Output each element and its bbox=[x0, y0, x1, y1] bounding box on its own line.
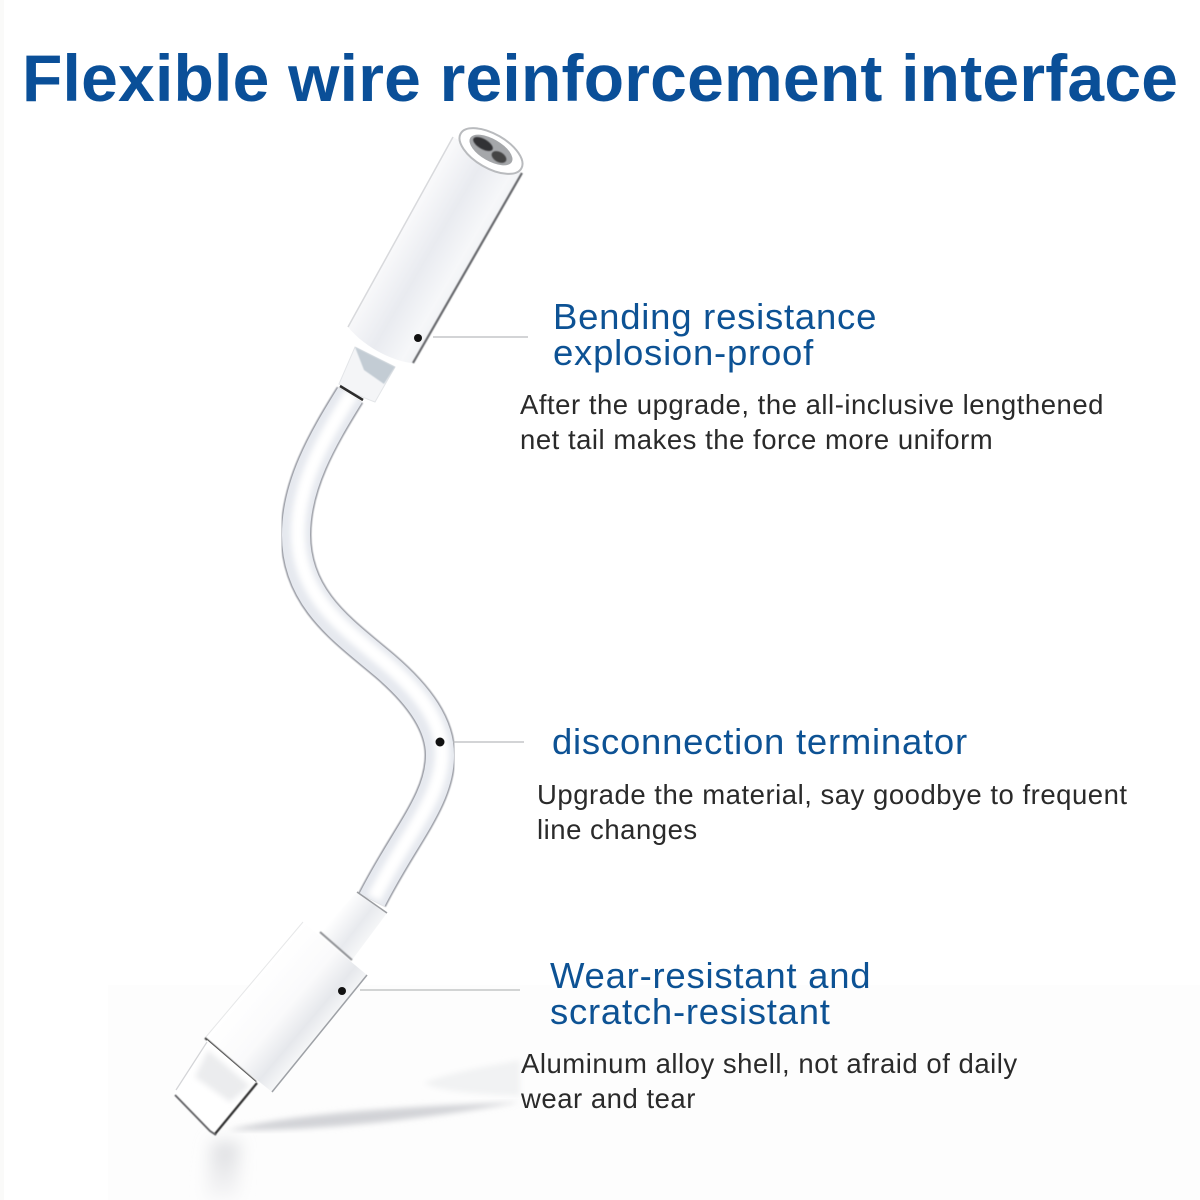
description: Upgrade the material, say goodbye to frequent bbox=[537, 779, 1128, 810]
description: Aluminum alloy shell, not afraid of daily bbox=[521, 1048, 1018, 1079]
description bbox=[520, 389, 1104, 455]
description bbox=[521, 1048, 1018, 1114]
cable bbox=[296, 393, 442, 900]
heading: Bending resistance bbox=[553, 296, 877, 337]
description bbox=[537, 779, 1128, 845]
heading: explosion-proof bbox=[553, 332, 814, 373]
callout: disconnection terminator bbox=[537, 721, 1128, 845]
description: line changes bbox=[537, 814, 698, 845]
lightning connector bbox=[174, 892, 387, 1135]
floor shadow bbox=[206, 1060, 520, 1200]
3.5mm jack housing bbox=[339, 119, 530, 402]
callout: bending resistance bbox=[520, 296, 1104, 455]
heading: disconnection terminator bbox=[552, 721, 968, 762]
callout: wear-resistant bbox=[521, 955, 1018, 1114]
jack marker dot bbox=[414, 334, 422, 342]
title: Flexible wire reinforcement interface bbox=[22, 41, 1178, 115]
cable marker dot bbox=[436, 738, 444, 746]
description: After the upgrade, the all-inclusive lengthened bbox=[520, 389, 1104, 420]
heading bbox=[553, 296, 877, 373]
heading: Wear-resistant and bbox=[550, 955, 871, 996]
leader lines bbox=[360, 337, 528, 990]
description: net tail makes the force more uniform bbox=[520, 424, 993, 455]
heading bbox=[550, 955, 871, 1032]
connector marker dot bbox=[338, 987, 346, 995]
description: wear and tear bbox=[521, 1083, 696, 1114]
heading: scratch-resistant bbox=[550, 991, 831, 1032]
